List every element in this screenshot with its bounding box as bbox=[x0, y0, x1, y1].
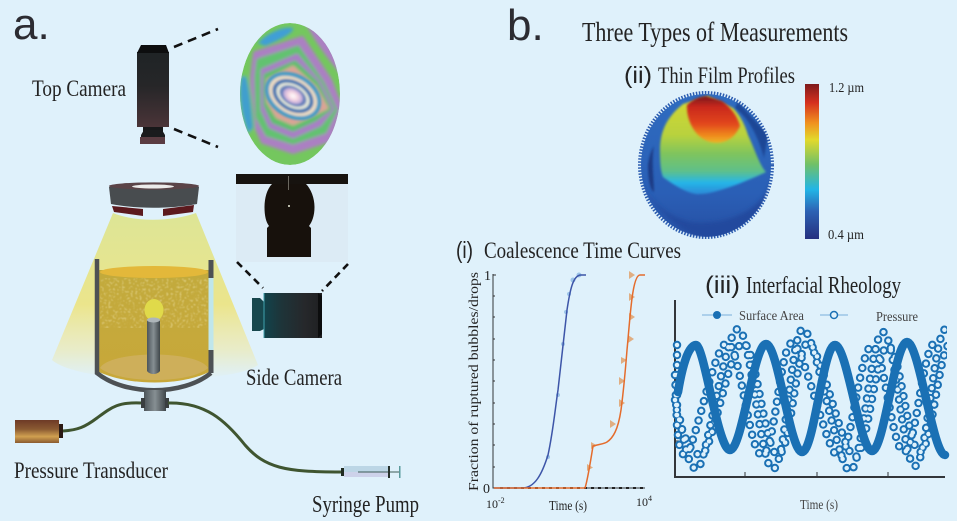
heading: interfacial rheology: Interfacial Rheology bbox=[746, 273, 901, 299]
icon: side camera bbox=[252, 293, 322, 338]
y axis label: Fraction of ruptured bubbles/drops bbox=[467, 272, 482, 491]
needle and drop bbox=[144, 299, 164, 374]
legend: surface area: Surface Area bbox=[739, 309, 805, 324]
image: interference pattern bbox=[239, 22, 345, 165]
dashed lines: side camera view bbox=[237, 262, 348, 291]
series: pressure bbox=[675, 329, 951, 471]
heading: thin film profiles: (ii) bbox=[624, 62, 652, 88]
dashed lines: top camera view bbox=[174, 29, 218, 147]
axes bbox=[675, 300, 945, 477]
heading: coalescence time curves: (i) bbox=[456, 237, 473, 263]
legend: surface area bbox=[702, 309, 805, 324]
heading: three types of measurements: Three Types of Measurements bbox=[582, 17, 848, 47]
orange curve bbox=[494, 275, 645, 488]
x tick label min: -2 bbox=[498, 496, 505, 505]
tube to transducer bbox=[63, 403, 141, 431]
blue curve bbox=[494, 275, 586, 488]
icon: pressure transducer bbox=[15, 420, 63, 443]
chart: coalescence time curves bbox=[493, 271, 645, 488]
color bar min label: 0.4 µm bbox=[828, 228, 864, 243]
label: side camera: Side Camera bbox=[246, 365, 342, 390]
color bar bbox=[805, 84, 819, 239]
label: syringe pump: Syringe Pump bbox=[312, 492, 419, 518]
icon: illuminator ring bbox=[109, 182, 199, 216]
x axis label: Time (s) bbox=[549, 499, 587, 514]
color bar max label: 1.2 µm bbox=[829, 81, 864, 96]
panel label b: b. bbox=[507, 1, 544, 50]
legend: pressure: Pressure bbox=[876, 310, 918, 325]
heading: thin film profiles bbox=[624, 62, 795, 88]
orange data markers bbox=[587, 271, 635, 471]
x axis label: Time (s) bbox=[800, 498, 838, 513]
panel label a: a. bbox=[13, 0, 50, 49]
light beam bbox=[52, 213, 258, 379]
label: top camera: Top Camera bbox=[32, 76, 126, 101]
y tick labels: 1 bbox=[484, 269, 491, 284]
y tick labels: 0 bbox=[483, 482, 490, 497]
heading: interfacial rheology bbox=[705, 272, 901, 299]
heading: thin film profiles: Thin Film Profiles bbox=[658, 63, 795, 88]
tube to syringe bbox=[168, 403, 341, 472]
blue data markers bbox=[546, 272, 582, 459]
3D thin film surface bbox=[640, 93, 773, 240]
icon: top camera bbox=[137, 45, 169, 144]
icon: syringe bbox=[341, 466, 400, 478]
x tick label max: 10 bbox=[636, 495, 648, 509]
x tick label min: 10 bbox=[486, 497, 498, 511]
stem fitting bbox=[141, 390, 169, 411]
image: side view of drop bbox=[236, 174, 348, 262]
vessel with liquid bbox=[97, 259, 211, 390]
heading: interfacial rheology: (iii) bbox=[705, 272, 740, 299]
label: pressure transducer: Pressure Transducer bbox=[14, 458, 168, 483]
heading: coalescence time curves: Coalescence Time Curves bbox=[484, 238, 681, 263]
y tick labels bbox=[483, 269, 491, 497]
series: surface area bbox=[678, 342, 945, 455]
x tick label max: 4 bbox=[648, 494, 652, 503]
chart: interfacial rheology bbox=[675, 300, 951, 477]
legend: pressure bbox=[820, 310, 918, 325]
